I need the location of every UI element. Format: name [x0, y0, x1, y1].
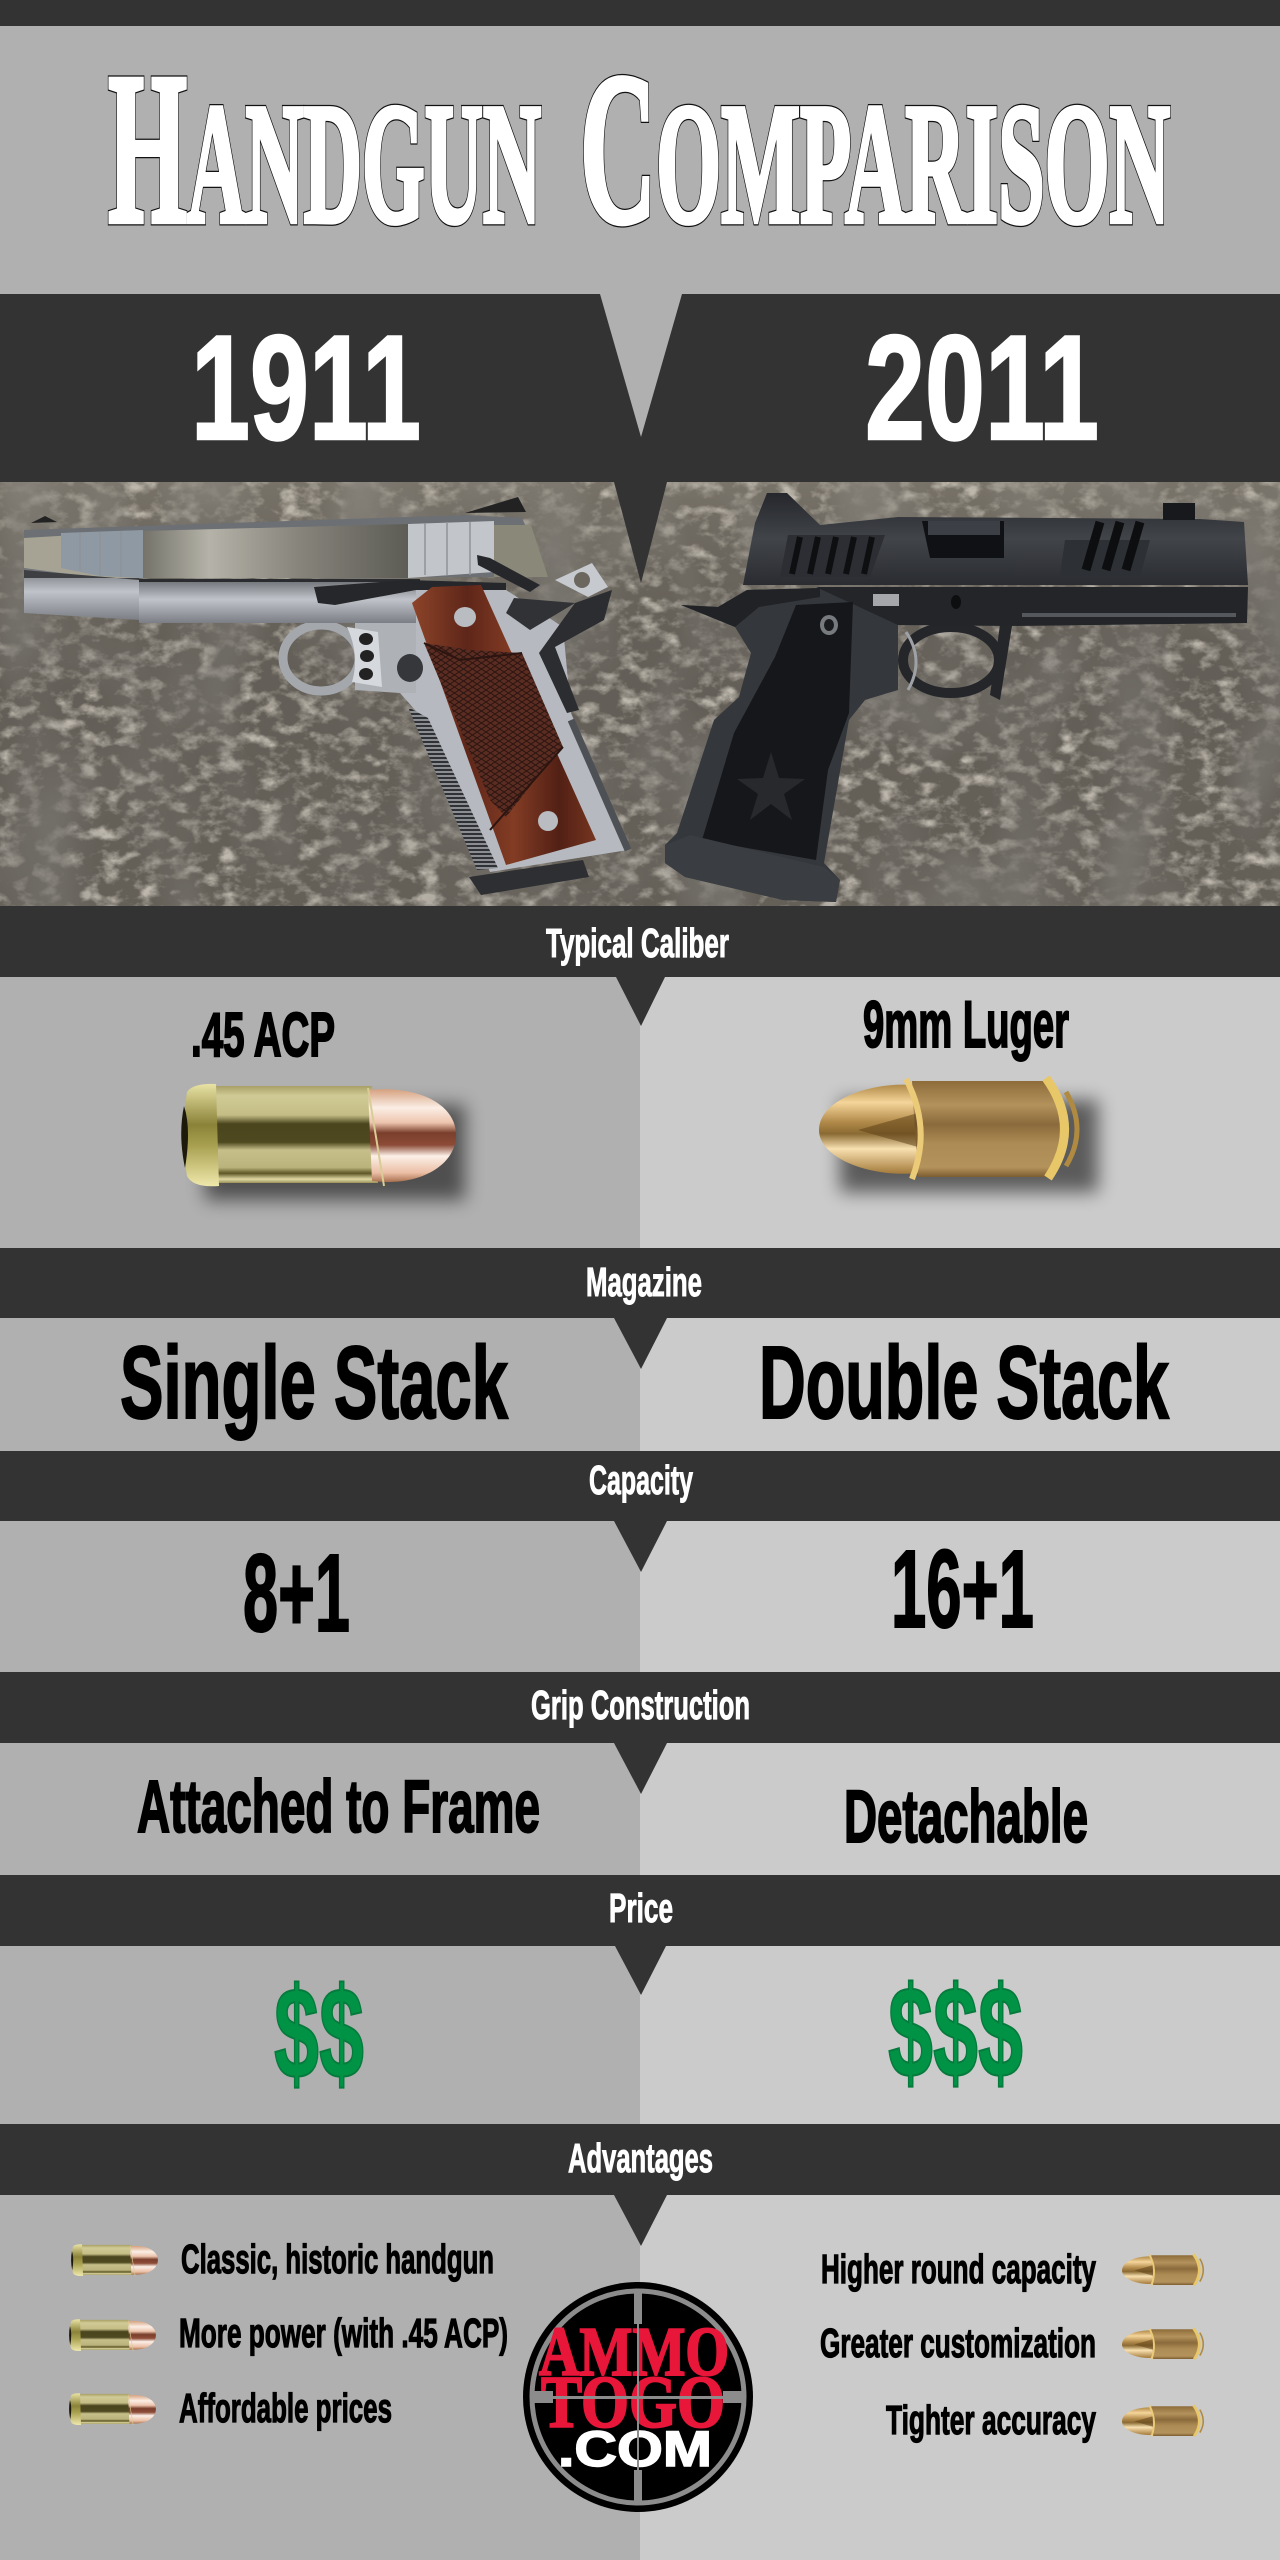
value: three dollars: $$$ — [888, 1959, 1023, 2105]
logo text: .com: .COM — [558, 2421, 712, 2477]
bullet icon — [69, 2393, 156, 2425]
band — [0, 906, 1280, 1026]
heading: Grip Construction — [531, 1682, 750, 1728]
bullet icon — [1122, 2254, 1203, 2286]
2011 pistol — [665, 493, 1248, 902]
bullet icon — [69, 2319, 156, 2351]
pointer: header tip — [614, 482, 667, 583]
item text: Classic, historic handgun — [181, 2236, 494, 2282]
bullet: 9mm Luger — [819, 1078, 1098, 1192]
magazine base — [665, 835, 840, 902]
band — [0, 1672, 1280, 1794]
panel: pistol photo — [0, 482, 1280, 906]
label: 2011: 2011 — [865, 304, 1099, 471]
panel backgrounds — [0, 2195, 1280, 2560]
value: two dollars: $$ — [274, 1960, 364, 2106]
logo text: ammo: AMMO — [539, 2314, 729, 2391]
panel backgrounds — [0, 1318, 1280, 1451]
heading: Advantages — [568, 2135, 713, 2181]
section: capacity — [0, 1451, 1280, 1672]
panel backgrounds — [0, 1946, 1280, 2124]
value: single stack: Single Stack — [120, 1325, 508, 1440]
title panel — [0, 26, 1280, 294]
grip star — [737, 752, 805, 820]
panel backgrounds — [0, 1521, 1280, 1672]
item text: Greater customization — [820, 2320, 1096, 2366]
list: 2011 advantages — [820, 2246, 1203, 2443]
section: magazine — [0, 1248, 1280, 1451]
title: HANDGUN — [108, 28, 541, 269]
1911 pistol — [24, 497, 628, 895]
heading: Typical Caliber — [546, 920, 729, 966]
value: 16+1: 16+1 — [891, 1528, 1034, 1651]
bullet: .45 ACP — [181, 1084, 465, 1200]
value: detachable: Detachable — [844, 1775, 1088, 1858]
heading: Magazine — [586, 1259, 702, 1305]
item text: More power (with .45 ACP) — [179, 2310, 508, 2356]
bullet icon — [1122, 2328, 1203, 2360]
value: 9mm Luger: 9mm Luger — [863, 987, 1069, 1061]
item text: Higher round capacity — [821, 2246, 1096, 2292]
thumb safety and hammer — [477, 555, 540, 592]
section: grip construction — [0, 1672, 1280, 1875]
band — [0, 1875, 1280, 1995]
heading: Price — [609, 1885, 673, 1931]
crosshair — [533, 2290, 743, 2504]
band — [0, 1248, 1280, 1369]
title — [108, 28, 1170, 269]
section: advantages — [0, 2124, 1280, 2560]
title: COMPARISON — [580, 28, 1170, 269]
panel backgrounds — [0, 1743, 1280, 1875]
value: .45 ACP: .45 ACP — [191, 1001, 335, 1070]
bullet icon — [1122, 2405, 1203, 2437]
top bar — [0, 0, 1280, 26]
label: 1911: 1911 — [191, 304, 421, 471]
item text: Affordable prices — [179, 2385, 392, 2431]
section: price — [0, 1875, 1280, 2124]
wood grip — [412, 585, 596, 865]
list: 1911 advantages — [69, 2236, 508, 2431]
value: 8+1: 8+1 — [243, 1532, 350, 1655]
panel backgrounds — [0, 977, 1280, 1248]
title: HANDGUN — [108, 28, 541, 269]
section: typical caliber — [0, 906, 1280, 1248]
magazine base — [469, 860, 589, 895]
logo: Ammo To Go — [523, 2282, 753, 2512]
band — [0, 2124, 1280, 2246]
item text: Tighter accuracy — [886, 2397, 1096, 2443]
band — [0, 1451, 1280, 1572]
bullet icon — [71, 2244, 158, 2276]
concrete background — [0, 482, 1280, 906]
title: COMPARISON — [580, 28, 1170, 269]
logo text: togo: TOGO — [541, 2362, 725, 2444]
comparison header band — [0, 294, 1280, 482]
value: attached to frame: Attached to Frame — [137, 1765, 540, 1848]
heading: Capacity — [589, 1457, 693, 1503]
